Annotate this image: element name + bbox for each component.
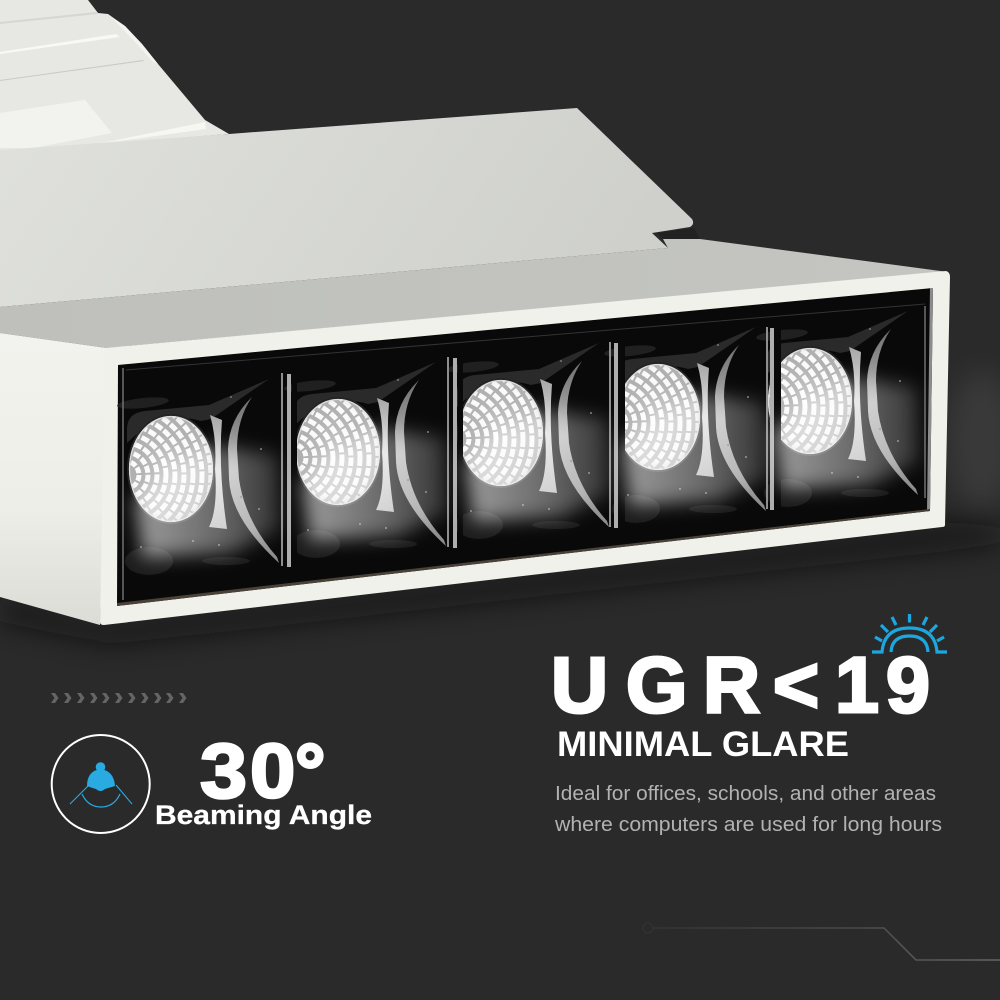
LED cell 2 (197, 362, 446, 558)
icon: sun glare (872, 614, 947, 652)
plate notch shadow (657, 228, 700, 239)
light beams (135, 377, 918, 557)
heading: 30 degrees: 3 (200, 729, 247, 815)
cell dividers (123, 306, 925, 600)
lamp floor reflection (0, 370, 1000, 645)
LED cell 5 (669, 311, 918, 507)
icon: beam angle (52, 735, 150, 833)
description: Ideal for offices, schools, and other areas (555, 783, 936, 805)
subheading: minimal glare: MINIMAL GLARE (557, 725, 849, 764)
heading: 30 degrees: ° (295, 729, 325, 814)
lamp body left side (0, 333, 107, 625)
label: beaming angle: Beaming Angle (155, 800, 372, 830)
lamp body top face (0, 239, 948, 348)
mounting plate (0, 108, 693, 307)
LED cell 1 (30, 379, 279, 575)
LED cell 3 (360, 343, 609, 539)
track adapter (0, 0, 229, 152)
description: where computers are used for long hours (554, 814, 942, 836)
heading: UGR<19: UGR<19 (551, 640, 930, 729)
heading: 30 degrees (200, 728, 325, 815)
chevron row (51, 693, 186, 703)
heading: 30 degrees: 0 (250, 728, 295, 814)
lamp front face (100, 271, 950, 625)
description (554, 783, 942, 836)
lens housing (30, 288, 933, 606)
LED cell 4 (517, 327, 766, 523)
decorative circuit line (643, 923, 1000, 960)
